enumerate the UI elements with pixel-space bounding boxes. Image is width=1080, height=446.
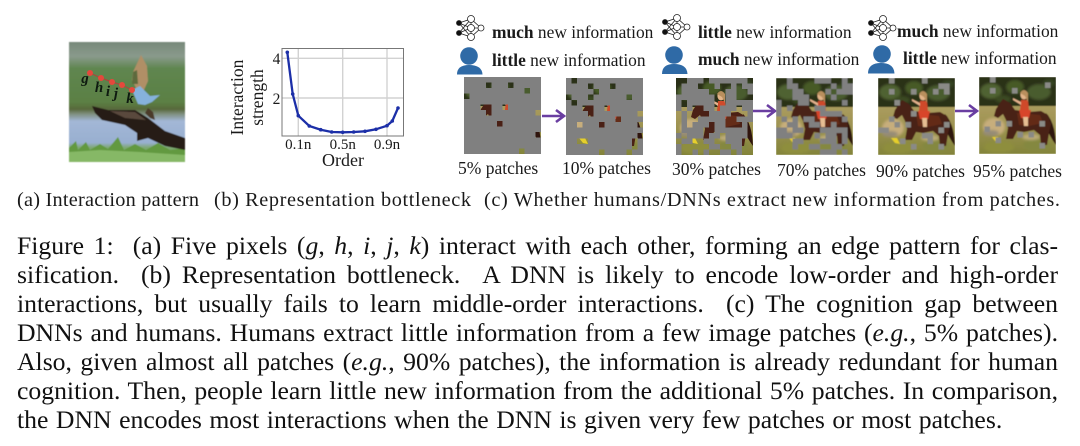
label: 10% patches: 10% patches <box>562 158 651 178</box>
subcaption (b): (b) Representation bottleneck <box>214 189 472 211</box>
pixel pattern: g h i j k: h <box>95 80 103 96</box>
y axis title: strength <box>247 69 267 126</box>
subcaption (c): (c) Whether humans/DNNs extract new information from patches. <box>484 189 1060 211</box>
figure caption paragraph: sification. (b) Representation bottleneck. A DNN is likely to encode low-order and high-order <box>17 260 1058 289</box>
line chart: representation bottleneck <box>227 48 404 170</box>
y axis ticks: 2 <box>273 91 280 108</box>
icon: neural network <box>868 16 896 40</box>
image: 10% patches <box>566 78 643 155</box>
y axis ticks: 4 <box>273 51 281 68</box>
text: DNN little new information: little new information <box>698 22 852 42</box>
text: DNN much new information: much new information <box>897 21 1059 41</box>
text: DNN much new information: much new information <box>492 22 654 42</box>
pixel pattern: g h i j k: k <box>126 91 134 107</box>
arrow <box>753 105 775 117</box>
figure caption paragraph: interactions, but usually fails to learn middle-order interactions. (c) The cognition gap between <box>17 289 1058 318</box>
text: human little new information: little new information <box>903 48 1057 68</box>
image: 30% patches <box>676 78 753 155</box>
label: 95% patches: 95% patches <box>973 161 1062 181</box>
figure caption paragraph: Also, given almost all patches (e.g., 90% patches), the information is already redundant for human <box>17 347 1058 376</box>
image: 90% patches <box>878 78 955 155</box>
figure caption paragraph <box>17 231 1058 434</box>
label: 70% patches: 70% patches <box>777 160 866 180</box>
label: 5% patches: 5% patches <box>458 158 538 178</box>
icon: neural network <box>456 16 484 40</box>
x axis ticks: 0.5n <box>330 137 356 153</box>
figure caption paragraph: the DNN encodes most interactions when the DNN is given very few patches or most patches. <box>17 405 1002 434</box>
text: human little new information: little new information <box>492 50 646 70</box>
pixel pattern: g h i j k: j <box>112 86 119 102</box>
curve: interaction strength <box>286 50 400 134</box>
y axis title <box>227 59 267 135</box>
figure caption paragraph: DNNs and humans. Humans extract little information from a few image patches (e.g., 5% patches). <box>17 318 1058 347</box>
figure caption paragraph: Figure 1: (a) Five pixels (g, h, i, j, k) interact with each other, forming an edge pattern for clas- <box>17 231 1058 260</box>
text: human much new information: much new information <box>698 49 860 69</box>
icon: person <box>662 46 688 74</box>
y axis title: Interaction <box>227 59 247 135</box>
image: 70% patches <box>776 78 853 155</box>
label: 30% patches: 30% patches <box>672 159 761 179</box>
panel: interaction pattern <box>69 42 185 162</box>
pixel pattern: g h i j k <box>80 70 135 107</box>
panel: patches comparison <box>456 14 1062 181</box>
bird photograph <box>69 42 185 162</box>
arrow <box>955 105 977 117</box>
label: 90% patches: 90% patches <box>876 161 965 181</box>
arrow <box>542 110 564 122</box>
image: 5% patches <box>464 77 541 154</box>
y axis ticks <box>273 51 281 108</box>
icon: person <box>457 47 482 74</box>
x axis ticks: 0.9n <box>374 137 401 153</box>
image: 95% patches <box>979 77 1056 154</box>
pixel pattern: g h i j k: i <box>106 84 111 100</box>
group: 5% to 10% patches <box>456 16 654 178</box>
subcaption (a): (a) Interaction pattern <box>17 189 199 211</box>
icon: person <box>868 45 894 74</box>
figure caption paragraph: cognition. Then, people learn little new information from the additional 5% patches. In comparison, <box>17 376 1058 405</box>
pixel pattern: g h i j k: g <box>80 71 89 87</box>
x axis ticks: 0.1n <box>285 137 312 153</box>
x axis ticks <box>285 137 401 153</box>
x axis title: Order <box>322 150 364 170</box>
group: 90% to 95% patches <box>868 16 1062 181</box>
icon: neural network <box>662 14 690 40</box>
group: 30% to 70% patches <box>662 14 866 180</box>
